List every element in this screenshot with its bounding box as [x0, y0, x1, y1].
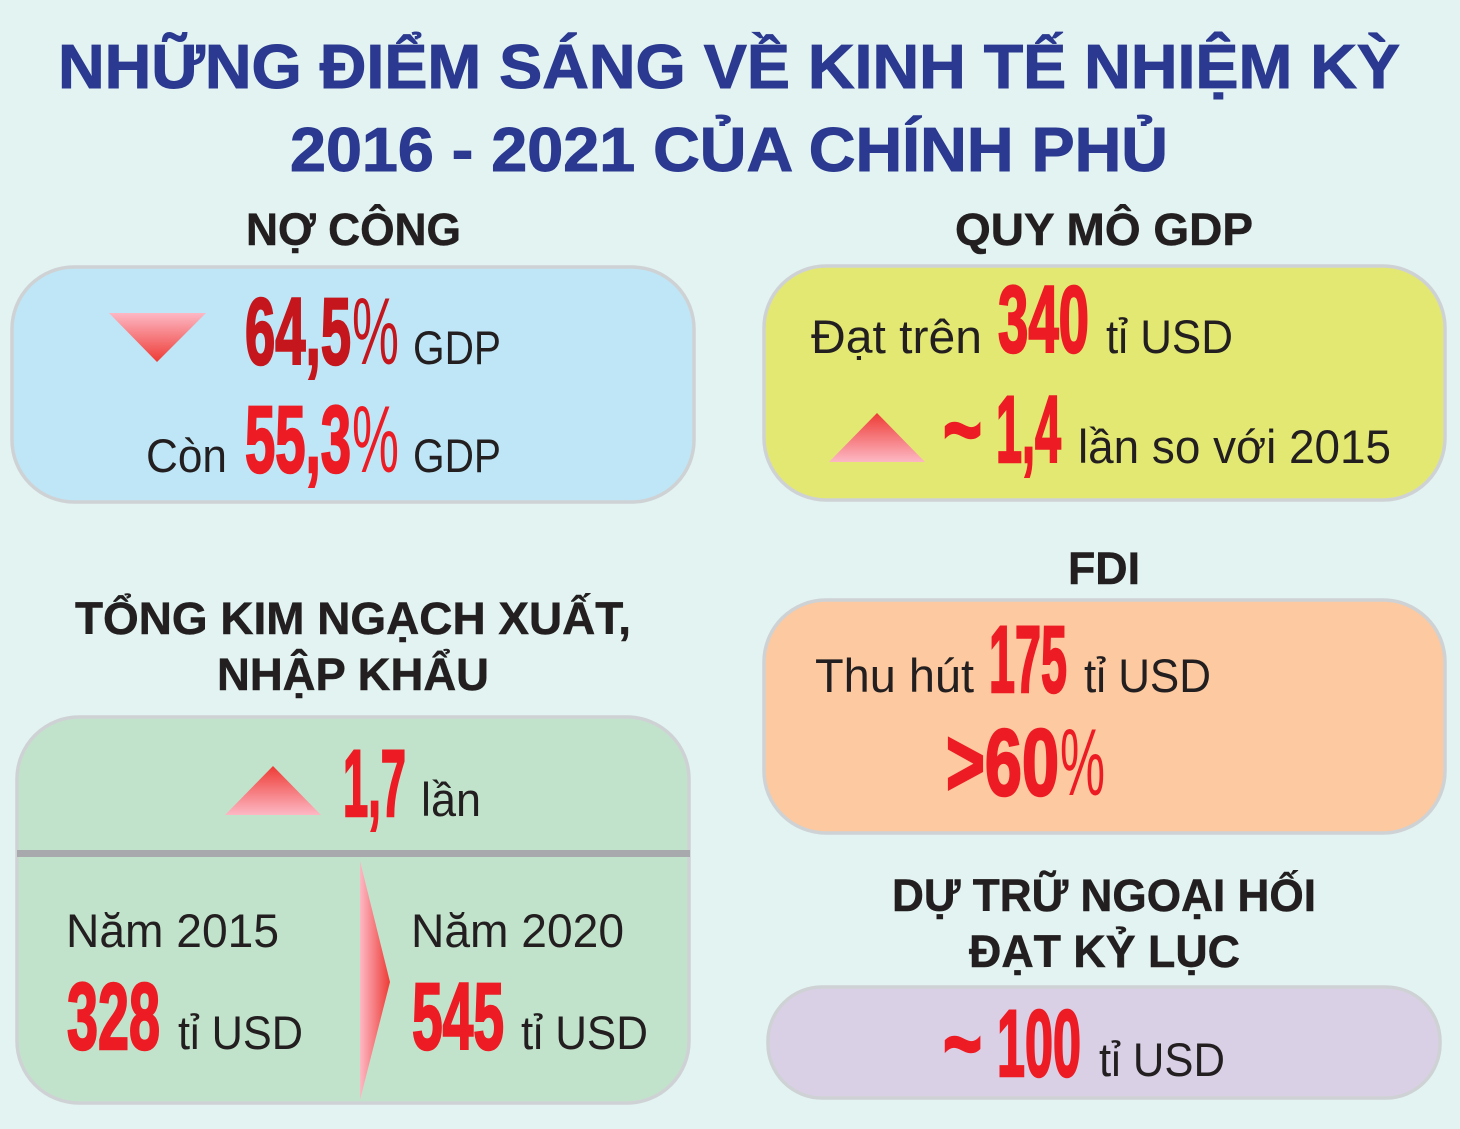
- value: >60%: %: [1060, 710, 1105, 816]
- panel: Dự trữ ngoại hối: [768, 987, 1440, 1098]
- value: >60%: >60: [946, 710, 1059, 816]
- heading: Dự trữ ngoại hối: DỰ TRỮ NGOẠI HỐI: [892, 870, 1316, 921]
- value: ~1,4 lần so với 2015: lần so với 2015: [1078, 420, 1391, 473]
- value: đạt trên 340 tỉ USD: Đạt trên: [811, 310, 982, 363]
- value: còn 55,3% GDP: 55,3: [245, 387, 351, 493]
- title: NHỮNG ĐIỂM SÁNG VỀ KINH TẾ NHIỆM KỲ: [58, 33, 1400, 102]
- value: thu hút 175 tỉ USD: 175: [989, 607, 1067, 713]
- value: còn 55,3% GDP: %: [352, 387, 399, 493]
- value: ~1,4 lần so với 2015: [943, 377, 1391, 483]
- value: năm 2020: Năm 2020: [411, 904, 624, 957]
- value: ~100 tỉ USD: tỉ USD: [1099, 1033, 1225, 1086]
- value: còn 55,3% GDP: [146, 387, 501, 493]
- heading: Quy mô GDP: QUY MÔ GDP: [955, 204, 1253, 255]
- icon: down triangle: [109, 313, 206, 362]
- value: 64,5% GDP: %: [352, 279, 399, 385]
- value: thu hút 175 tỉ USD: tỉ USD: [1084, 649, 1211, 702]
- value: đạt trên 340 tỉ USD: tỉ USD: [1106, 310, 1233, 363]
- heading: Tổng kim ngạch xuất, nhập khẩu: [75, 593, 631, 700]
- heading: Dự trữ ngoại hối: ĐẠT KỶ LỤC: [969, 926, 1240, 977]
- panel: Quy mô GDP: [764, 266, 1445, 500]
- value: đạt trên 340 tỉ USD: [811, 267, 1233, 373]
- value: còn 55,3% GDP: Còn: [146, 429, 227, 482]
- title: 2016 - 2021 CỦA CHÍNH PHỦ: [290, 116, 1168, 185]
- heading: Tổng kim ngạch xuất, nhập khẩu: NHẬP KHẨU: [217, 649, 489, 700]
- value: năm 2015: Năm 2015: [66, 904, 279, 957]
- icon: up triangle: [829, 413, 925, 462]
- panel: Tổng kim ngạch xuất, nhập khẩu: [17, 717, 690, 1103]
- heading: Nợ công: NỢ CÔNG: [246, 204, 461, 255]
- value: còn 55,3% GDP: GDP: [413, 429, 501, 482]
- panel: FDI: [764, 600, 1445, 833]
- value: ~100 tỉ USD: ~: [943, 991, 982, 1097]
- value: thu hút 175 tỉ USD: Thu hút: [815, 649, 974, 702]
- value: ~100 tỉ USD: [943, 991, 1225, 1097]
- value: 1,7 lần: 1,7: [343, 731, 406, 837]
- value: đạt trên 340 tỉ USD: 340: [998, 267, 1089, 373]
- heading: Dự trữ ngoại hối: [892, 870, 1316, 977]
- value: năm 2015: tỉ USD: [178, 1006, 303, 1059]
- arrow: [360, 861, 390, 1100]
- value: 64,5% GDP: GDP: [413, 321, 501, 374]
- value: năm 2020: [411, 904, 648, 1070]
- value: ~1,4 lần so với 2015: ~: [943, 377, 982, 483]
- value: ~100 tỉ USD: 100: [997, 991, 1081, 1097]
- value: 64,5% GDP: 64,5: [245, 279, 351, 385]
- value: năm 2015: 328: [67, 964, 160, 1070]
- value: 1,7 lần: lần: [421, 773, 481, 826]
- value: năm 2020: 545: [412, 964, 504, 1070]
- value: thu hút 175 tỉ USD: [815, 607, 1211, 713]
- title: [58, 33, 1400, 185]
- value: năm 2015: [66, 904, 303, 1070]
- panel: Nợ công: [12, 267, 694, 502]
- icon: up triangle: [225, 766, 321, 815]
- heading: Tổng kim ngạch xuất, nhập khẩu: TỔNG KIM NGẠCH XUẤT,: [75, 593, 631, 644]
- heading: FDI: FDI: [1068, 543, 1140, 594]
- value: ~1,4 lần so với 2015: 1,4: [996, 377, 1061, 483]
- value: năm 2020: tỉ USD: [521, 1006, 648, 1059]
